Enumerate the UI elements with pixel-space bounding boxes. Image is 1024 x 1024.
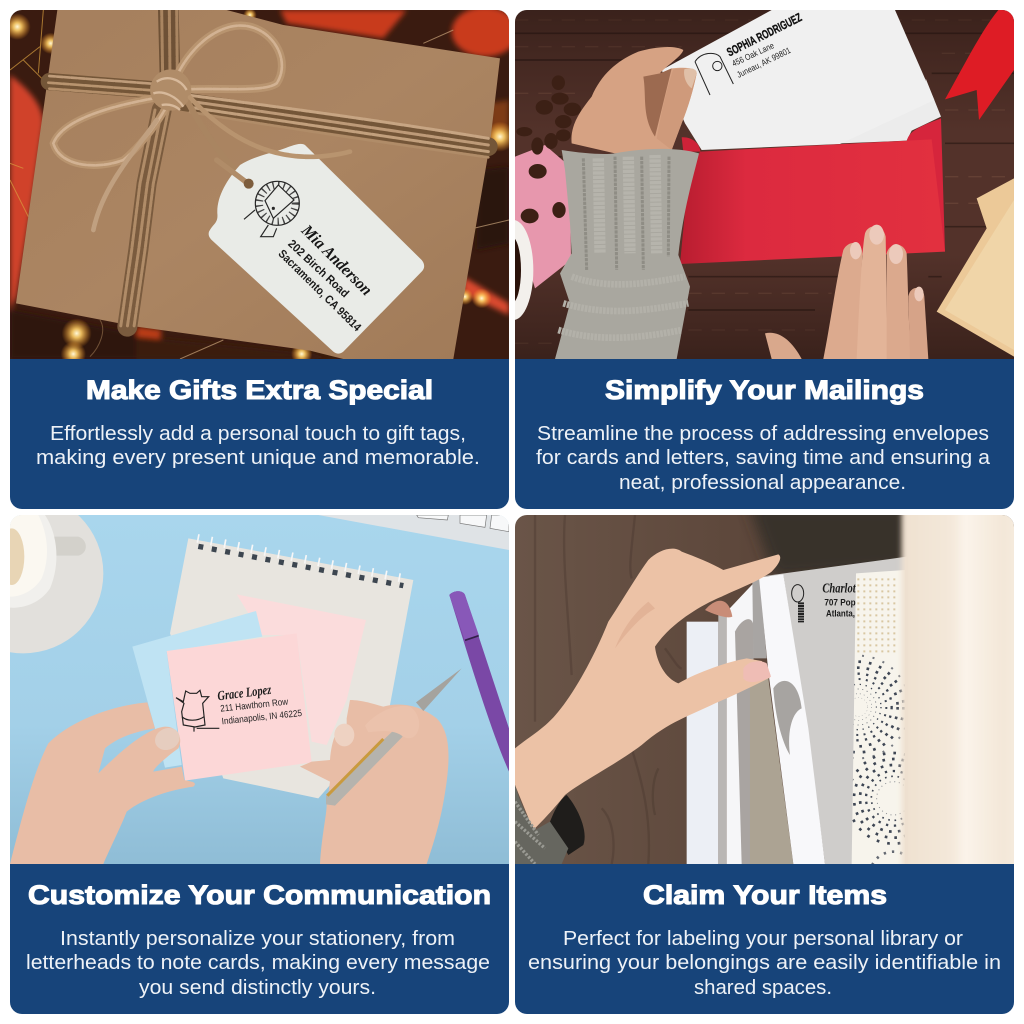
patterned fabric bbox=[807, 570, 939, 898]
twine ribbon bbox=[48, 10, 488, 327]
window light bbox=[687, 622, 718, 864]
left hand bbox=[10, 702, 195, 864]
body text: neat, professional appearance. bbox=[619, 472, 906, 494]
photo: hand pulling folder from shelf bbox=[515, 515, 1014, 864]
pink front note: Indianapolis, IN 46225 bbox=[221, 708, 302, 726]
body text: you send distinctly yours. bbox=[139, 977, 376, 999]
coffee cup bbox=[515, 220, 534, 320]
body text: Perfect for labeling your personal library or bbox=[563, 928, 963, 950]
sweater cuff bbox=[515, 785, 585, 864]
heading: Claim Your Items bbox=[643, 880, 887, 910]
notebook bbox=[170, 538, 413, 798]
curtain bbox=[902, 502, 1024, 878]
folder address: 707 Pop bbox=[824, 598, 856, 608]
caption: simplify bbox=[515, 359, 1014, 509]
folder address: Atlanta, bbox=[826, 609, 855, 619]
tan paper bbox=[937, 178, 1014, 357]
body text: ensuring your belongings are easily identifiable in bbox=[528, 952, 1001, 974]
body text: letterheads to note cards, making every message bbox=[26, 952, 490, 974]
body text: Effortlessly add a personal touch to gift tags, bbox=[50, 423, 466, 445]
hand bbox=[515, 549, 780, 830]
photo: kraft gift box with tag bbox=[4, 7, 518, 367]
silver pen bbox=[326, 668, 462, 806]
body text bbox=[36, 423, 480, 469]
pink front note bbox=[167, 633, 312, 781]
body text: Streamline the process of addressing envelopes bbox=[537, 423, 989, 445]
panel: claim your items bbox=[515, 502, 1024, 1014]
white envelope insert bbox=[840, 78, 941, 143]
body text: shared spaces. bbox=[694, 977, 832, 999]
panel: simplify your mailings bbox=[493, 10, 1014, 509]
photo: hands with red envelope on wood table bbox=[493, 10, 1014, 359]
purple pen bbox=[449, 591, 509, 772]
gift tag: 202 Birch Road bbox=[285, 237, 351, 300]
caption: make gifts bbox=[10, 359, 509, 509]
pink front note: 211 Hawthorn Row bbox=[220, 697, 289, 714]
caption: claim bbox=[515, 864, 1014, 1014]
panel: make gifts extra special bbox=[4, 7, 518, 509]
blue note bbox=[132, 611, 262, 768]
saucer and cup bbox=[10, 515, 104, 654]
white letter bbox=[662, 10, 934, 150]
heading: Make Gifts Extra Special bbox=[86, 375, 433, 405]
red envelope front bbox=[680, 139, 945, 264]
knit sleeve bbox=[555, 149, 699, 359]
tag address: Mia Anderson bbox=[297, 220, 376, 299]
gift tag: Sacramento, CA 95814 bbox=[276, 247, 364, 334]
folder address bbox=[792, 581, 857, 622]
red envelope back bbox=[906, 118, 945, 252]
panel: customize your communication bbox=[0, 493, 509, 1014]
envelope address: 456 Oak Lane bbox=[730, 40, 776, 68]
body text: making every present unique and memorable. bbox=[36, 447, 480, 469]
keyboard bbox=[318, 515, 509, 550]
coffee beans bbox=[516, 75, 581, 223]
body text: for cards and letters, saving time and ensuring a bbox=[536, 447, 991, 469]
hand holding envelope bbox=[571, 47, 697, 153]
heading: Simplify Your Mailings bbox=[605, 375, 924, 405]
pink paper bbox=[515, 145, 571, 288]
body text: Instantly personalize your stationery, from bbox=[60, 928, 455, 950]
gift tag bbox=[190, 97, 424, 354]
folder bbox=[760, 557, 907, 864]
gift box bbox=[16, 10, 500, 359]
right hand fingers bbox=[765, 225, 928, 359]
folder address: Charlot bbox=[822, 581, 857, 596]
envelope address: Juneau, AK 99801 bbox=[735, 45, 792, 80]
cow stamp bbox=[176, 690, 219, 732]
body text bbox=[528, 928, 1001, 999]
caption: customize bbox=[10, 864, 509, 1014]
body text bbox=[536, 423, 991, 494]
right hand bbox=[300, 668, 462, 864]
lion stamp bbox=[244, 181, 299, 237]
pink back note bbox=[237, 594, 366, 745]
heading: Customize Your Communication bbox=[28, 880, 491, 910]
pink front note: Grace Lopez bbox=[217, 682, 272, 703]
envelope address bbox=[695, 10, 804, 95]
body text bbox=[26, 928, 490, 999]
red ribbon bbox=[945, 10, 1014, 120]
photo: hands with note cards on blue desk bbox=[0, 493, 509, 864]
